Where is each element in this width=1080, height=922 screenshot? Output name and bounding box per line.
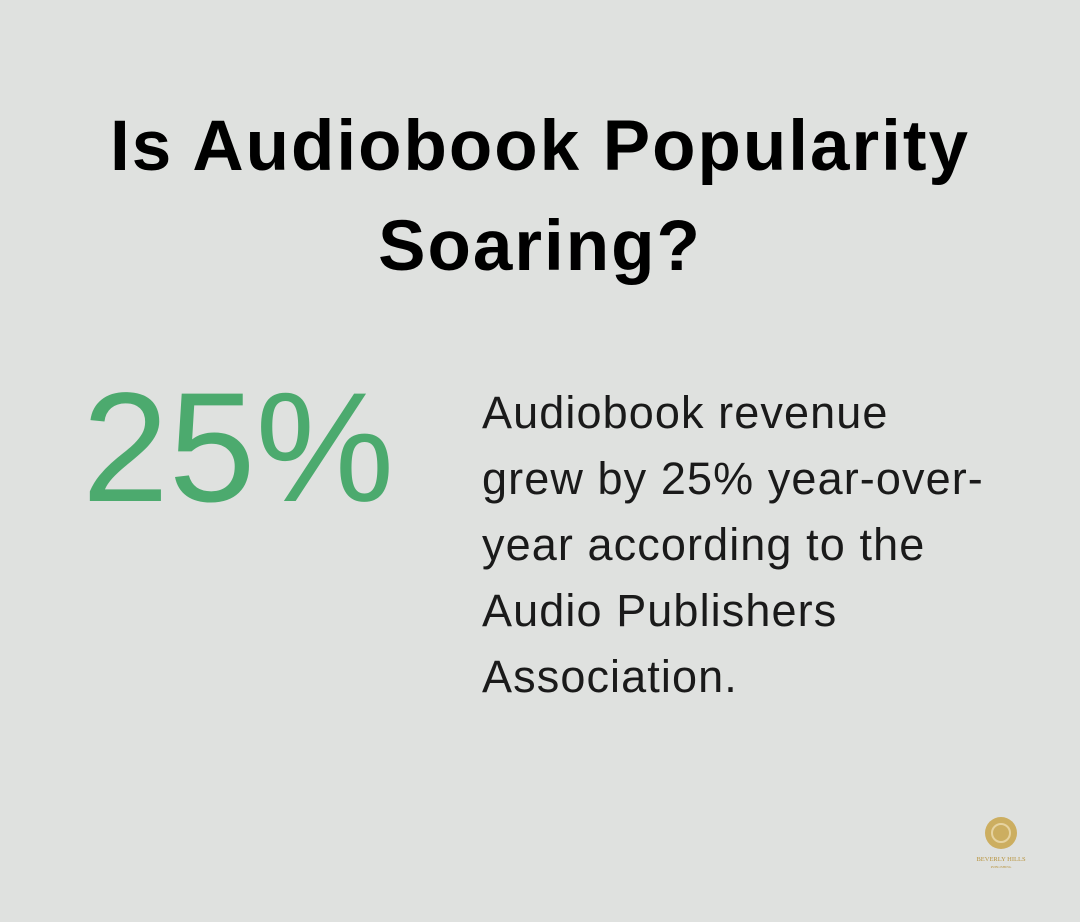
description text: Audiobook revenue	[482, 387, 888, 438]
description text: year according to the	[482, 519, 925, 570]
title	[110, 107, 970, 286]
description text: Association.	[482, 651, 738, 702]
description text	[482, 387, 984, 702]
logo: Beverly Hills	[976, 817, 1026, 869]
title: Soaring?	[378, 207, 702, 286]
description text: Audio Publishers	[482, 585, 837, 636]
statistic: 25%: 25%	[82, 361, 394, 535]
description text: grew by 25% year-over-	[482, 453, 984, 504]
logo: Beverly Hills: BEVERLY HILLS	[976, 856, 1026, 863]
logo: Beverly Hills: PUBLISHING	[991, 865, 1012, 869]
title: Is Audiobook Popularity	[110, 107, 970, 186]
